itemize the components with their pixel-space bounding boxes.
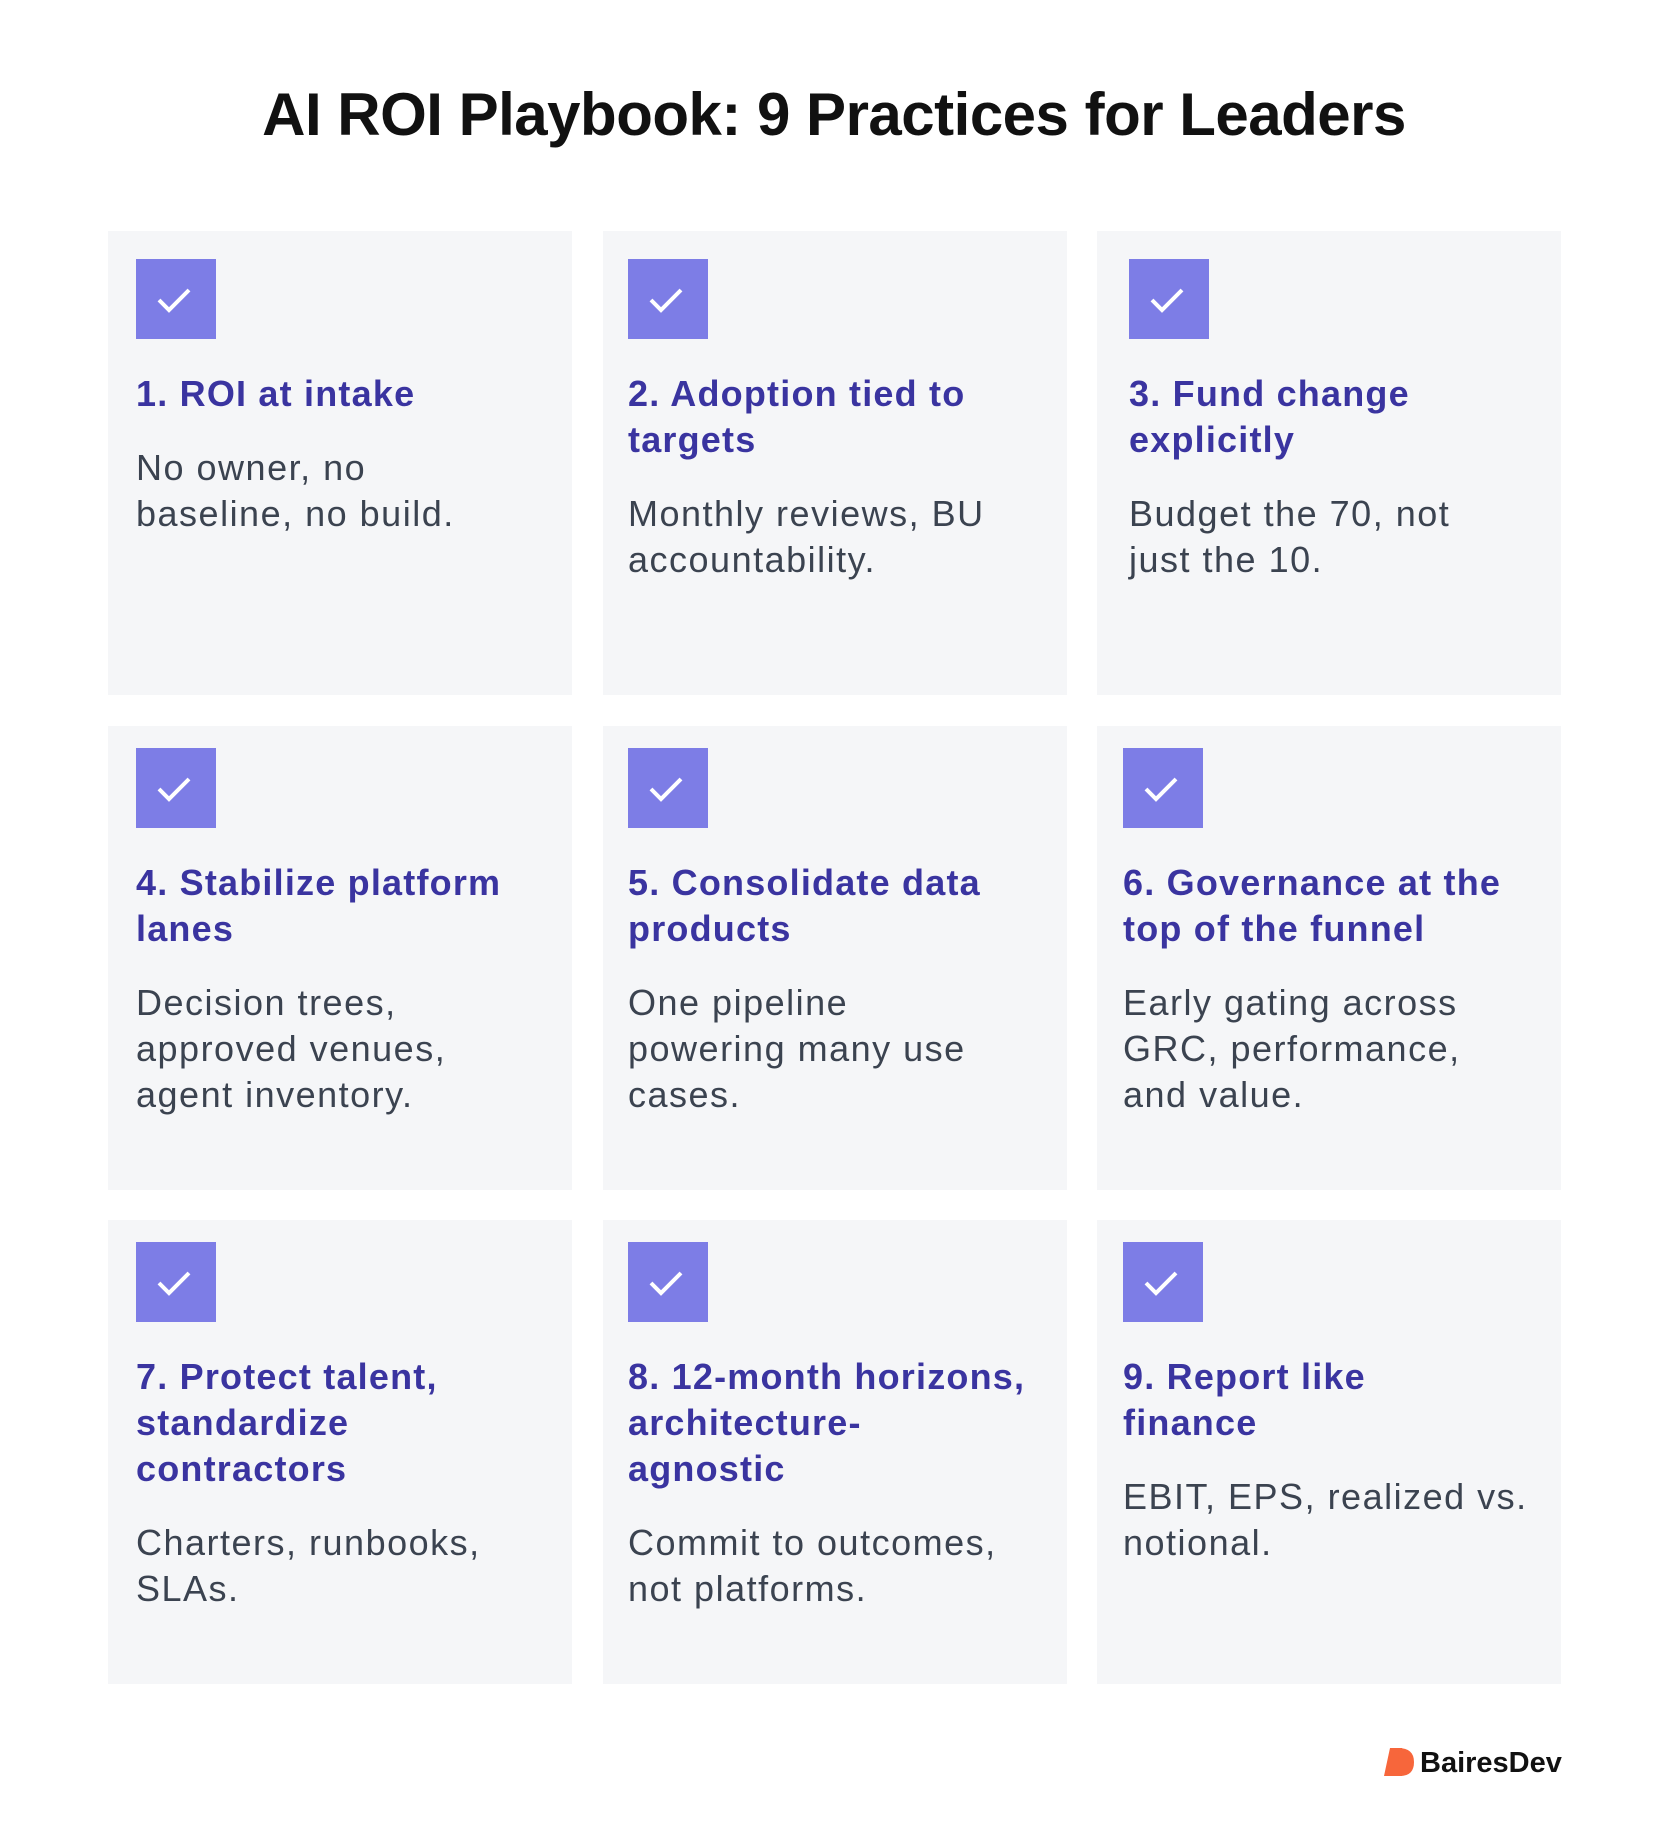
heading: architecture-: [628, 1402, 862, 1443]
text: [628, 493, 985, 580]
heading: [136, 862, 501, 949]
heading: 3. Fund change: [1129, 373, 1410, 414]
text: approved venues,: [136, 1028, 446, 1069]
panel: 7: [108, 1220, 572, 1684]
heading: 4. Stabilize platform: [136, 862, 501, 903]
heading: explicitly: [1129, 419, 1295, 460]
text: [1123, 1476, 1528, 1563]
panel: 5: [603, 726, 1067, 1190]
heading: targets: [628, 419, 756, 460]
heading: 1. ROI at intake: [136, 373, 415, 414]
text: [136, 982, 446, 1115]
panel: 3: [1097, 231, 1561, 695]
heading: agnostic: [628, 1448, 786, 1489]
icon: checkbox: [136, 259, 216, 339]
icon: checkbox: [1129, 259, 1209, 339]
text: GRC, performance,: [1123, 1028, 1461, 1069]
text: [1123, 982, 1461, 1115]
icon: checkbox: [628, 259, 708, 339]
text: not platforms.: [628, 1568, 867, 1609]
heading: standardize: [136, 1402, 349, 1443]
heading: [1129, 373, 1410, 460]
icon: checkbox: [136, 1242, 216, 1322]
heading: top of the funnel: [1123, 908, 1425, 949]
text: notional.: [1123, 1522, 1273, 1563]
heading: [628, 373, 965, 460]
heading: 5. Consolidate data: [628, 862, 981, 903]
text: cases.: [628, 1074, 741, 1115]
icon: checkbox: [1123, 1242, 1203, 1322]
heading: [136, 1356, 438, 1489]
text: SLAs.: [136, 1568, 240, 1609]
panel: 8: [603, 1220, 1067, 1684]
panel: 2: [603, 231, 1067, 695]
heading: 8. 12-month horizons,: [628, 1356, 1025, 1397]
heading: [628, 1356, 1025, 1489]
text: [628, 982, 966, 1115]
text: agent inventory.: [136, 1074, 414, 1115]
heading: [1123, 1356, 1366, 1443]
heading: products: [628, 908, 792, 949]
text: [136, 447, 455, 534]
logo: BairesDev: BairesDev: [1420, 1747, 1562, 1779]
text: Commit to outcomes,: [628, 1522, 997, 1563]
text: Decision trees,: [136, 982, 397, 1023]
heading: [1123, 862, 1501, 949]
heading: lanes: [136, 908, 234, 949]
heading: contractors: [136, 1448, 347, 1489]
text: Budget the 70, not: [1129, 493, 1450, 534]
text: Charters, runbooks,: [136, 1522, 481, 1563]
text: powering many use: [628, 1028, 966, 1069]
icon: checkbox: [1123, 748, 1203, 828]
heading: [628, 862, 981, 949]
icon: checkbox: [628, 748, 708, 828]
text: and value.: [1123, 1074, 1304, 1115]
text: accountability.: [628, 539, 876, 580]
heading: 7. Protect talent,: [136, 1356, 438, 1397]
icon: checkbox: [136, 748, 216, 828]
heading: 6. Governance at the: [1123, 862, 1501, 903]
heading: finance: [1123, 1402, 1257, 1443]
text: Monthly reviews, BU: [628, 493, 985, 534]
panel: 4: [108, 726, 572, 1190]
icon: checkbox: [628, 1242, 708, 1322]
text: One pipeline: [628, 982, 848, 1023]
text: EBIT, EPS, realized vs.: [1123, 1476, 1528, 1517]
title: AI ROI Playbook: 9 Practices for Leaders: [262, 81, 1406, 148]
text: No owner, no: [136, 447, 366, 488]
heading: 2. Adoption tied to: [628, 373, 965, 414]
text: Early gating across: [1123, 982, 1458, 1023]
text: [628, 1522, 997, 1609]
panel: 6: [1097, 726, 1561, 1190]
text: [136, 1522, 481, 1609]
text: [1128, 493, 1450, 580]
text: baseline, no build.: [136, 493, 455, 534]
heading: 9. Report like: [1123, 1356, 1366, 1397]
panel: 9: [1097, 1220, 1561, 1684]
panel: 1: [108, 231, 572, 695]
text: just the 10.: [1129, 539, 1323, 580]
